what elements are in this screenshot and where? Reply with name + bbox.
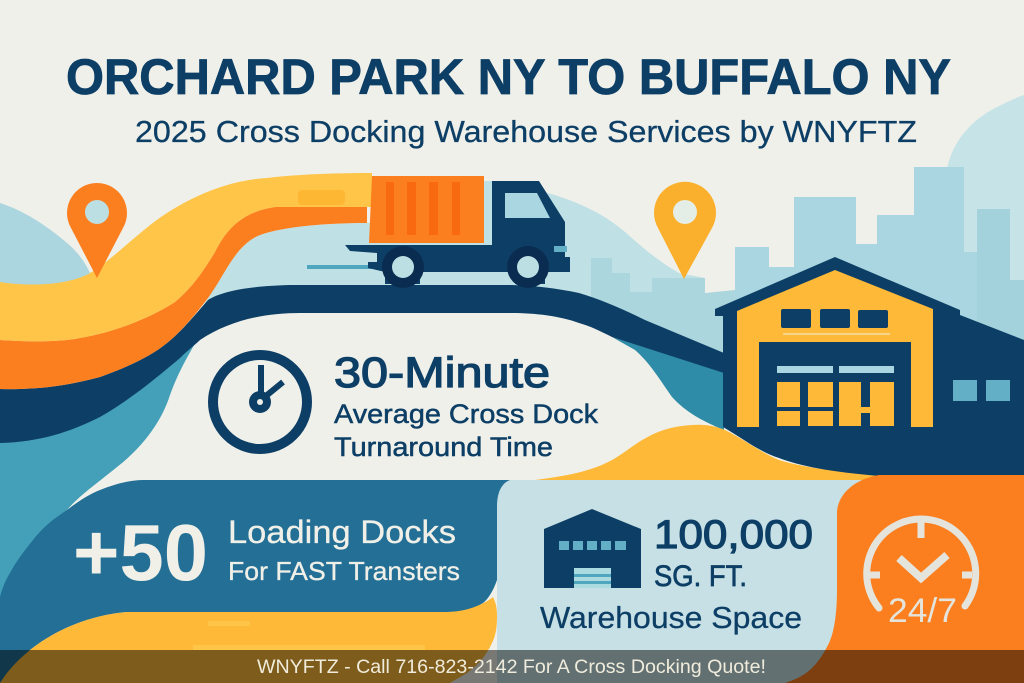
- panel: loading docks: [0, 480, 510, 683]
- icon: clock: [213, 355, 307, 449]
- warehouse upper windows: [781, 309, 888, 328]
- stat label line 2: For FAST Transters: [228, 556, 460, 586]
- truck window: [505, 193, 550, 218]
- teal wave right: [612, 337, 724, 430]
- background: city skyline and hills: [0, 95, 1024, 380]
- stat label line 2: Turnaround Time: [334, 432, 553, 462]
- icon: warehouse: [544, 509, 641, 588]
- icon: delivery truck: [307, 176, 570, 288]
- truck chassis and cab: [345, 181, 570, 284]
- route band: navy road: [0, 285, 724, 443]
- footer call-to-action bar: WNYFTZ - Call 716-823-2142 For A Cross Docking Quote!: [257, 657, 766, 678]
- warehouse side windows: [953, 380, 977, 401]
- stat label: Warehouse Space: [540, 600, 802, 635]
- icon: yellow location pin: [654, 182, 716, 279]
- warehouse door: [777, 366, 894, 426]
- truck headlight: [554, 246, 567, 252]
- yellow hump: [535, 425, 880, 482]
- truck speed line: [307, 265, 377, 269]
- panel: turnaround time: [213, 349, 599, 462]
- stat unit: SG. FT.: [654, 560, 747, 593]
- panel: warehouse space: [497, 480, 900, 683]
- warehouse body and base: [715, 257, 1024, 476]
- stat label line 1: Average Cross Dock: [334, 399, 599, 429]
- yellow wave bottom: [0, 597, 497, 683]
- subtitle: 2025 Cross Docking Warehouse Services by WNYFTZ: [135, 114, 917, 149]
- warehouse building: [715, 257, 1024, 476]
- icon: orange location pin: [67, 183, 127, 278]
- teal wave left: [0, 335, 200, 620]
- footer call-to-action bar: [0, 650, 1024, 683]
- front wheel: [507, 246, 549, 288]
- stat: 30-Minute: 30-Minute: [334, 349, 550, 397]
- cargo container: [369, 176, 484, 243]
- stat label line 1: Loading Docks: [228, 514, 456, 550]
- rear wheel: [382, 246, 424, 288]
- title: ORCHARD PARK NY TO BUFFALO NY: [66, 49, 951, 105]
- stat: 100,000: 100,000: [654, 513, 813, 557]
- panel: 24/7: [785, 475, 1024, 683]
- warehouse yellow facade: [737, 270, 933, 427]
- stat: +50: +50: [73, 508, 208, 597]
- route band: yellow: [0, 173, 372, 341]
- route band: orange: [0, 207, 367, 389]
- 24/7 text: 24/7: [888, 592, 957, 630]
- icon: 24/7 clock: [867, 519, 976, 608]
